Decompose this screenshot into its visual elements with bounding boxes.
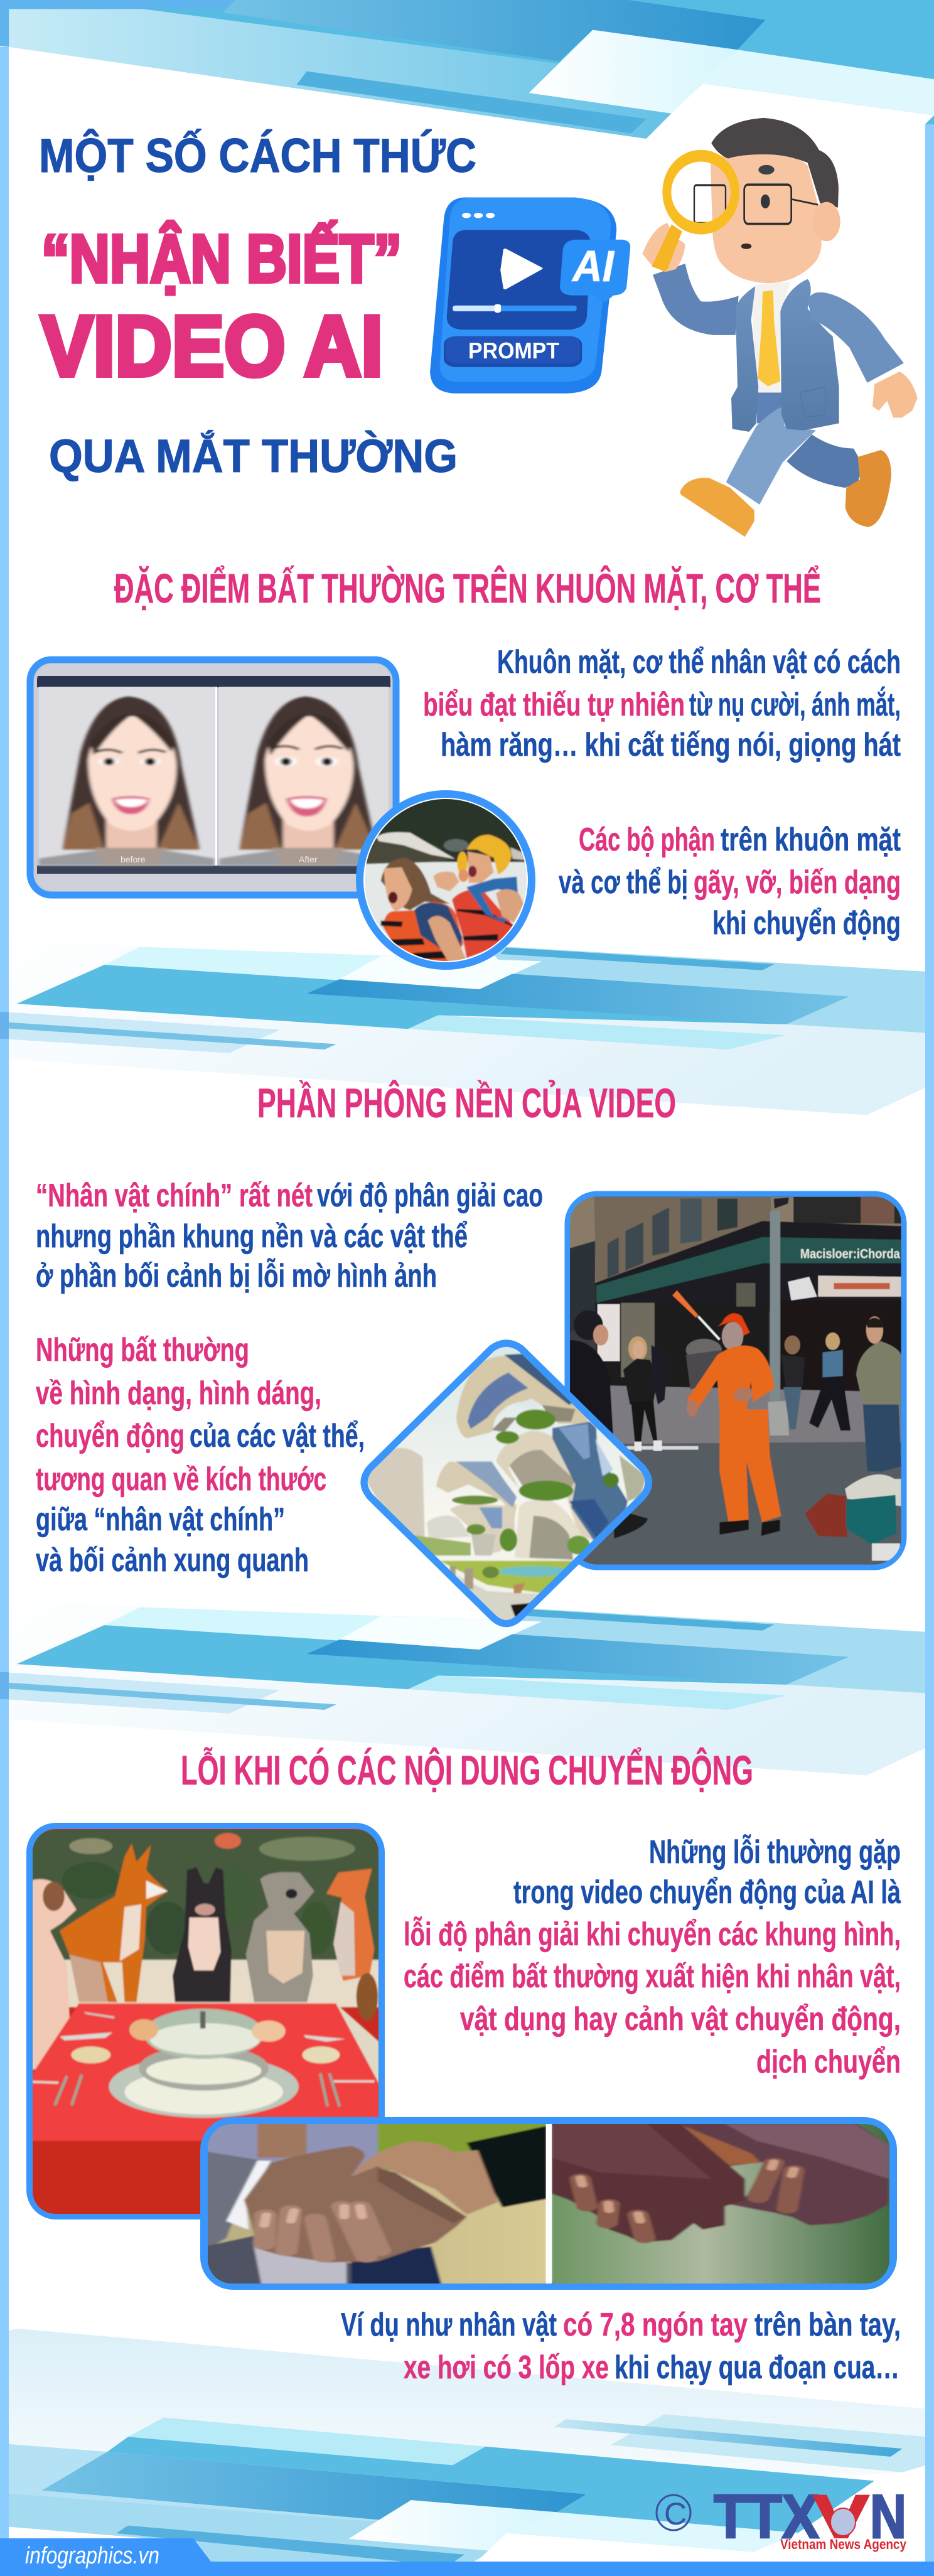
letter V: V [813,2482,869,2551]
diamond border [364,1343,648,1624]
shirt [751,282,791,392]
holding hand [642,223,685,272]
magnifier ring [667,156,735,228]
text: section 2 paragraph 1: với độ phân giải cao [317,1178,543,1214]
text: section 2 paragraph 1 [36,1178,543,1294]
photo: futuristic building diamond [358,1334,659,1635]
letters TTX: TTX [714,2482,819,2551]
text: section 2 paragraph 2: Những bất thường [36,1332,249,1368]
text: section 2 paragraph 2: tương quan về kích thước [36,1461,326,1498]
street photo frame [567,1194,904,1567]
photo contents: After [299,854,318,864]
left half [204,2122,547,2287]
jacket right panel [780,279,839,431]
text: closing example: Ví dụ như nhân vật [341,2307,557,2343]
raised arm [653,264,739,335]
dogs frame [30,1826,382,2216]
text: section 1 paragraph 2: Các bộ phận [579,822,715,858]
text: section 2 paragraph 2: và bối cảnh xung quanh [36,1542,309,1579]
text: section 2 paragraph 1: ở phần bối cảnh bị lỗi mờ hình ảnh [36,1258,437,1294]
text: section 1 paragraph 2: và cơ thể bị [559,864,688,901]
hair [711,118,839,208]
title line 4: QUA MẮT THƯỜNG [49,430,458,482]
character: man with magnifying glass [642,118,918,537]
text: closing example [341,2307,901,2386]
handshake frame [204,2121,893,2286]
left glasses lens [694,185,726,223]
decoration: top angular band [0,0,934,180]
copyright letter: C [664,2496,687,2531]
text: section 2 paragraph 2: của các vật thể, [190,1418,365,1454]
text: section 1 paragraph 1: biểu đạt thiếu tự nhiên [423,687,685,723]
heading: section 2: PHẦN PHÔNG NỀN CỦA VIDEO [257,1080,676,1126]
text: section 2 paragraph 2: chuyển động [36,1418,185,1454]
text: closing example: xe hơi có 3 lốp xe [404,2349,609,2386]
mouth [741,244,751,249]
title [39,129,476,482]
lowered hand [872,372,918,418]
jacket left panel [731,286,758,432]
forehead mark [758,165,775,174]
trouser waist [757,392,781,423]
decoration: middle angular band two [0,1598,934,1775]
logo: TTXVN [657,2482,907,2552]
footer bar [0,2538,934,2576]
title line 1: MỘT SỐ CÁCH THỨC [39,129,476,183]
right glasses lens [744,185,792,224]
title line 3: VIDEO AI [41,298,383,394]
street scene: Macisloer:iChorda [800,1247,900,1262]
man right face [468,852,494,883]
front leg [726,407,816,505]
eye [761,195,770,208]
copyright mark [657,2495,690,2530]
text: section 2 paragraph 2 [36,1332,365,1579]
face [711,154,822,283]
text: section 3 paragraph [404,1834,901,2080]
photo: rafting circle [360,794,532,969]
photo contents [37,676,390,874]
man right helmet back [457,852,468,874]
building scene [358,1334,659,1635]
circle border [360,794,532,966]
front shoe [680,478,754,537]
photo frame [30,660,396,895]
woman left [381,858,450,910]
decoration: bottom angular band [0,2329,934,2562]
lowered arm [808,292,904,383]
decoration: middle angular band one [0,938,934,1115]
back shoe [845,450,891,527]
text: section 2 paragraph 2: giữa “nhân vật chính” [36,1501,285,1538]
jacket pocket [800,387,825,417]
text: section 2 paragraph 1: “Nhân vật chính” rất nét [36,1178,313,1214]
dogs scene [31,1829,379,2225]
photo: handshakes [204,2121,894,2289]
right half [551,2122,894,2287]
text: section 1 paragraph 1 [423,644,901,763]
rafting scene [362,795,529,969]
photo: street performer [567,1194,904,1567]
text: section 2 paragraph 1: nhưng phần khung nền và các vật thể [36,1218,468,1255]
glasses arm [792,199,818,205]
ear [813,202,840,241]
agency globe [830,2508,856,2536]
text: section 2 paragraph 2: về hình dạng, hình dáng, [36,1375,321,1412]
title line 2: “NHẬN BIẾT” [41,220,402,296]
tie [758,290,780,387]
photo: before and after faces [30,660,396,895]
label: PROMPT: PROMPT [468,338,559,363]
footer site name: infographics.vn [25,2543,159,2569]
icon: AI video prompt app [430,198,630,394]
photo divider [546,2122,552,2289]
handshake scenes [204,2122,894,2289]
text: section 1 paragraph 2 [559,822,901,942]
text: closing example: có 7,8 ngón tay [563,2307,748,2343]
agency name: Vietnam News Agency [780,2536,907,2552]
label: AI: AI [571,242,615,291]
back leg [786,434,863,488]
letter N: N [870,2482,906,2551]
photo: dogs at table [30,1826,382,2225]
photo contents: before [121,854,146,864]
street scene [569,1196,901,1565]
magnifier handle [652,224,682,272]
